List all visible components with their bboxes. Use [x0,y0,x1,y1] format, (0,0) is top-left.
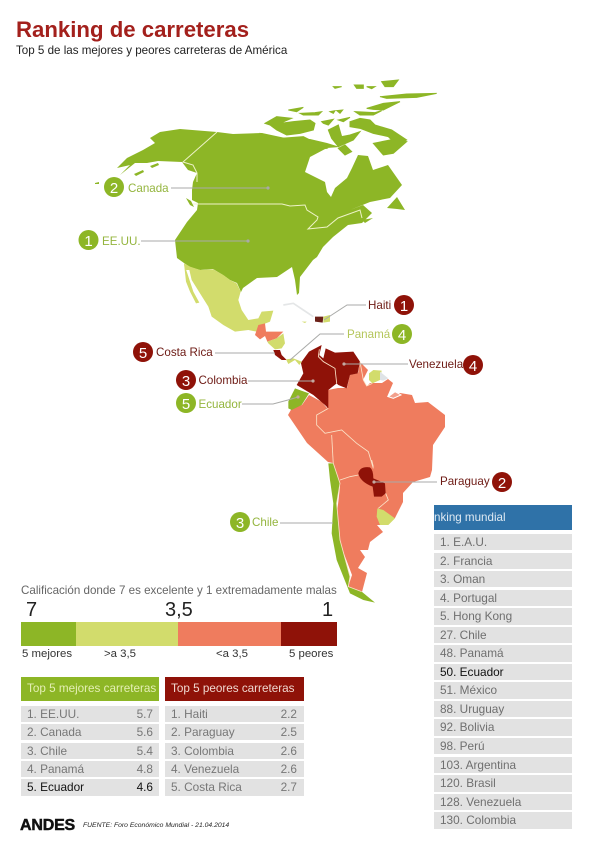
Costa Rica [273,350,287,360]
country borders north [183,132,362,229]
table: world ranking: 51. México [440,683,497,697]
leader lines [141,188,437,523]
Paraguay [358,467,386,497]
logo: ANDES: ANDES [20,817,75,834]
label: Venezuela [409,355,483,375]
table: top 5 worst roads: 4. Venezuela [171,762,239,776]
label: Colombia: Colombia [198,374,248,387]
Guyana area [369,370,382,383]
northern borders [317,349,373,468]
Mexico mainland [184,263,273,332]
source note: FUENTE: Foro Económico Mundial - 21.04.2014 [83,822,229,829]
label: Panamá [347,324,412,344]
Newfoundland [387,197,405,210]
title: Ranking de carreteras [16,17,249,42]
legend caption: Calificación donde 7 es excelente y 1 extremadamente malas [21,584,337,597]
label: Paraguay: 2 [498,475,506,492]
table: top 5 worst roads: 2.6 [281,744,297,758]
label: Chile [230,512,278,532]
table: top 5 best roads: 4.6 [137,780,153,794]
table: world ranking: 50. Ecuador [440,665,504,679]
table: top 5 best roads: 3. Chile [27,744,67,758]
table: world ranking: 27. Chile [440,628,487,642]
label: Chile: Chile [252,516,278,529]
table: world ranking: 48. Panamá [440,646,504,660]
scale labels: <a 3,5 [216,648,248,660]
table: world ranking: 3. Oman [440,572,485,586]
scale labels: >a 3,5 [104,648,136,660]
worst table header: Top 5 peores carreteras [171,682,294,695]
label: Haiti: 1 [400,298,408,315]
label: Costa Rica: 5 [139,345,147,362]
scale numbers [26,599,333,621]
arctic islands [260,80,437,155]
label: EE.UU.: 1 [84,233,93,250]
legend: rating scale [21,584,337,660]
scale labels [22,648,333,660]
table: top 5 best roads: 5.4 [137,744,153,758]
table: world ranking: 120. Brasil [440,776,496,790]
North America: Canada and USA [95,80,437,295]
label: Haiti [368,295,414,315]
table: world ranking: 1. E.A.U. [440,535,487,549]
Baja California [184,263,199,303]
label: Costa Rica [133,342,213,362]
label: Panamá: 4 [398,327,406,344]
label: Colombia: 3 [182,373,190,390]
scale numbers: 1 [322,599,333,621]
table: top 5 best roads: 5. Ecuador [27,780,84,794]
Mexico and Central America [184,263,330,365]
table: world ranking: 130. Colombia [440,813,516,827]
Ecuador [288,388,309,410]
label: Venezuela: 4 [469,358,477,375]
table: world ranking: 103. Argentina [440,758,516,772]
world ranking header [434,505,572,530]
label: Canada: Canada [128,182,169,195]
table: top 5 best roads: 4. Panamá [27,762,84,776]
table: top 5 best roads: 5.6 [137,725,153,739]
table: world ranking: 88. Uruguay [440,702,504,716]
Marajó [388,392,401,398]
label: EE.UU.: EE.UU. [102,235,141,248]
label: Canada: 2 [110,180,118,197]
label: Paraguay: Paraguay [440,475,490,488]
scale colour bar [21,622,337,646]
label: EE.UU. [78,230,141,250]
table: top 5 worst roads: 5. Costa Rica [171,780,242,794]
table: top 5 best roads: 1. EE.UU. [27,707,79,721]
label: Chile: 3 [236,515,244,532]
label: Panamá: Panamá [347,328,391,341]
table: world ranking: 2. Francia [440,554,492,568]
South America [288,345,445,603]
scale numbers: 3,5 [165,599,193,621]
table: top 5 best roads: 5.7 [137,707,153,721]
scale labels: 5 mejores [22,648,72,660]
label: Canada [104,177,169,197]
Chile [328,463,375,603]
label: Costa Rica: Costa Rica [156,346,213,359]
table: world ranking: 5. Hong Kong [440,609,512,623]
table: top 5 worst roads [165,677,304,796]
label: Ecuador: 5 [182,396,190,413]
world ranking header: nking mundial [434,511,506,524]
worst table header [165,677,304,701]
Panama [286,358,302,365]
Uruguay [377,508,395,525]
best table header [21,677,159,701]
label: Paraguay [440,472,512,492]
table: top 5 worst roads: 2. Paraguay [171,725,235,739]
table: top 5 worst roads: 3. Colombia [171,744,234,758]
table: top 5 worst roads: 2.7 [281,780,297,794]
table: top 5 best roads: 2. Canada [27,725,81,739]
label: Colombia [176,370,248,390]
table: top 5 worst roads: 2.2 [281,707,297,721]
table: world ranking: 92. Bolivia [440,720,494,734]
table: world ranking: 4. Portugal [440,591,497,605]
Nicaragua [267,333,285,349]
table: top 5 best roads [21,677,159,796]
table: top 5 worst roads: 2.6 [281,762,297,776]
southern borders [333,460,388,592]
scale numbers: 7 [26,599,37,621]
label: Ecuador [176,393,242,413]
Guatemala and Honduras [255,323,283,342]
scale labels: 5 peores [289,648,333,660]
subtitle: Top 5 de las mejores y peores carreteras de América [16,44,287,57]
table: top 5 worst roads: 2.5 [281,725,297,739]
label: Haiti: Haiti [368,299,391,312]
table: world ranking [434,505,572,829]
label: Venezuela: Venezuela [409,358,464,371]
Caribbean islands [283,303,313,317]
label: Ecuador: Ecuador [198,398,242,411]
table: world ranking: 128. Venezuela [440,795,521,809]
best table header: Top 5 mejores carreteras [27,682,156,695]
Colombia [297,345,337,408]
table: world ranking: 98. Perú [440,739,485,753]
table: top 5 best roads: 4.8 [137,762,153,776]
table: top 5 worst roads: 1. Haiti [171,707,208,721]
Venezuela [319,348,360,388]
Brazil, Peru, Bolivia, Argentina [288,362,445,592]
